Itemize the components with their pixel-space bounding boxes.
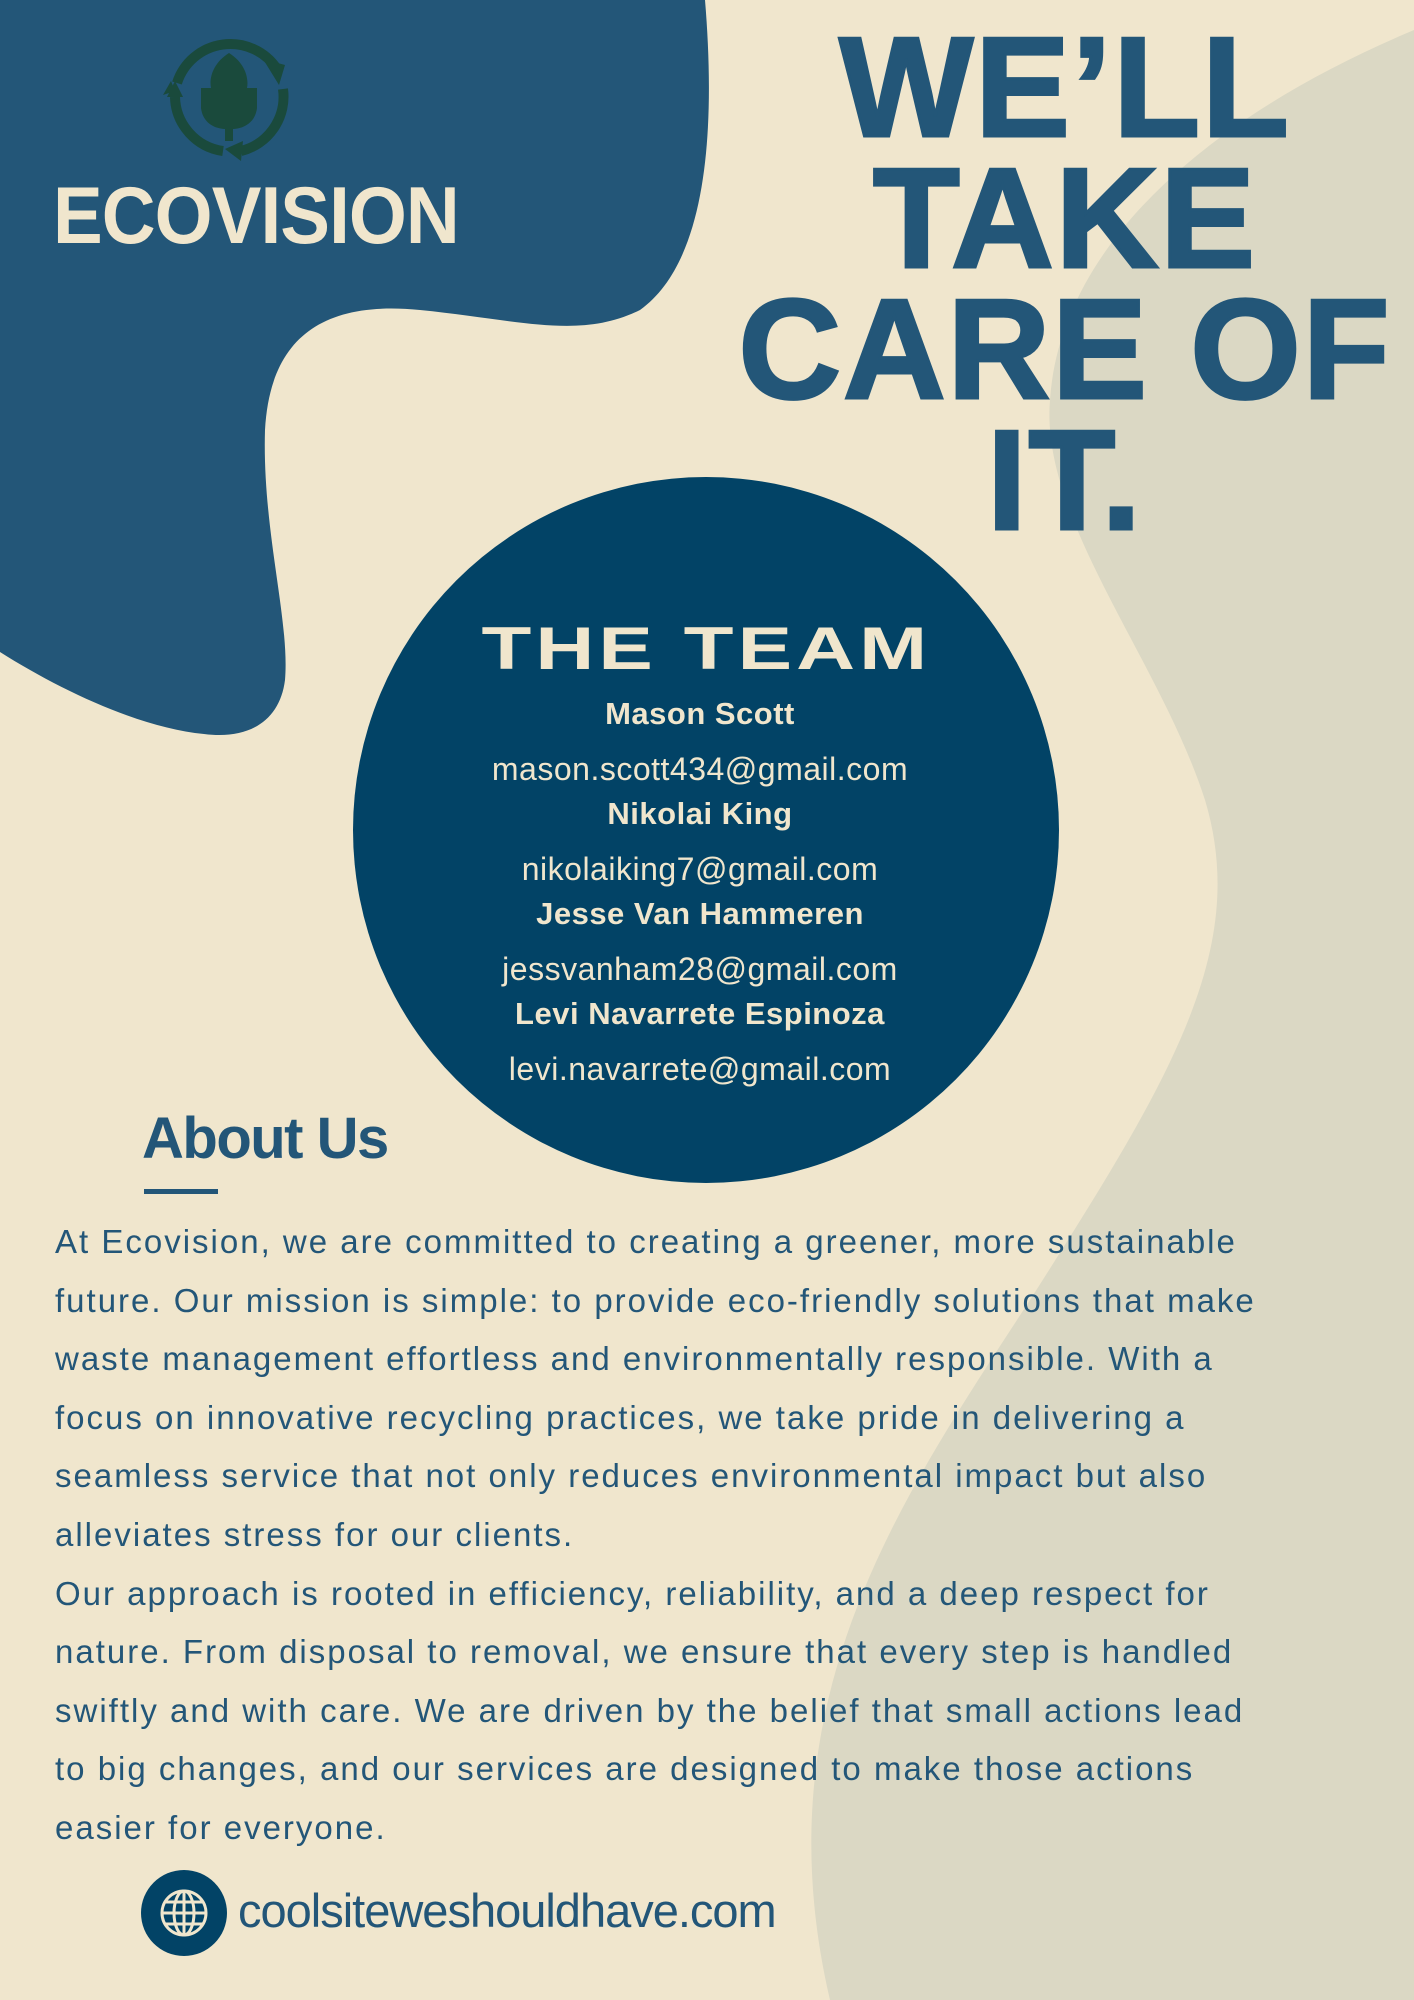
right grey shape [811, 30, 1414, 2000]
team list: Jesse Van Hammeren [536, 896, 864, 931]
headline: CARE OF [738, 270, 1392, 429]
team list [492, 696, 908, 1087]
website: coolsiteweshouldhave.com [238, 1884, 776, 1937]
brand name: ECOVISION [53, 171, 459, 261]
about text [55, 1223, 1256, 1846]
about text: At Ecovision, we are committed to creating a greener, more sustainable [55, 1223, 1237, 1260]
team circle [353, 477, 1059, 1183]
about text: future. Our mission is simple: to provide eco-friendly solutions that make [55, 1282, 1256, 1319]
headline: TAKE [873, 139, 1257, 298]
team list: levi.navarrete@gmail.com [509, 1051, 891, 1087]
team list: jessvanham28@gmail.com [502, 951, 898, 987]
about text: seamless service that not only reduces environmental impact but also [55, 1457, 1207, 1494]
top-left blob [0, 0, 709, 735]
underline [144, 1189, 218, 1194]
team list: mason.scott434@gmail.com [492, 751, 908, 787]
about text: swiftly and with care. We are driven by the belief that small actions lead [55, 1692, 1244, 1729]
about text: focus on innovative recycling practices, we take pride in delivering a [55, 1399, 1186, 1436]
about text: easier for everyone. [55, 1809, 387, 1846]
headline: WE’LL [839, 8, 1291, 167]
logo icon [163, 39, 288, 161]
headline [738, 8, 1392, 560]
about heading: About Us [142, 1106, 388, 1171]
team list: nikolaiking7@gmail.com [522, 851, 878, 887]
about text: nature. From disposal to removal, we ensure that every step is handled [55, 1633, 1233, 1670]
team list: Mason Scott [605, 696, 795, 731]
team list: Nikolai King [607, 796, 793, 831]
headline: IT. [987, 401, 1143, 560]
team list: Levi Navarrete Espinoza [515, 996, 885, 1031]
globe icon [141, 1870, 227, 1956]
team heading: THE TEAM [481, 615, 931, 682]
about text: waste management effortless and environmentally responsible. With a [55, 1340, 1214, 1377]
about text: alleviates stress for our clients. [55, 1516, 574, 1553]
about text: to big changes, and our services are designed to make those actions [55, 1750, 1194, 1787]
about text: Our approach is rooted in efficiency, reliability, and a deep respect for [55, 1575, 1210, 1612]
